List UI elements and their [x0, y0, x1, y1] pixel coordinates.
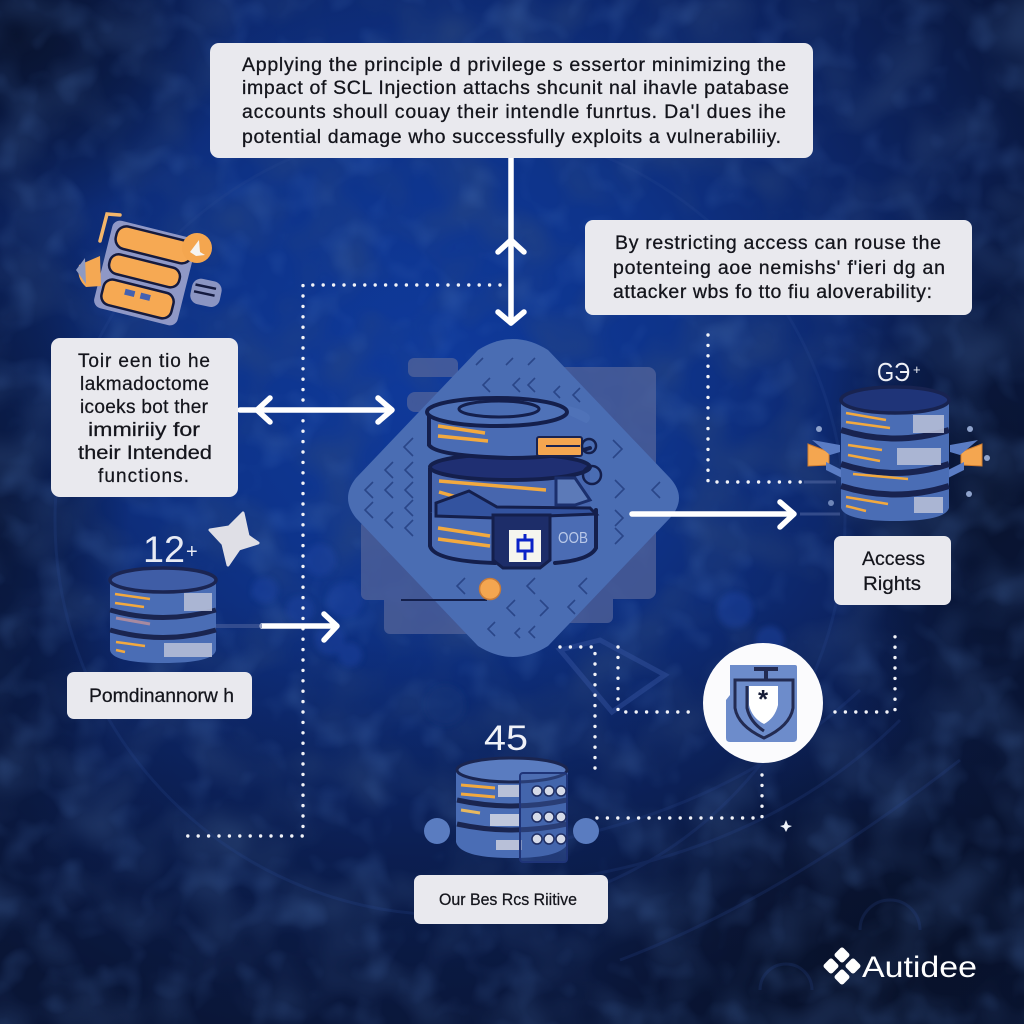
callout: left text: immiriiy for [88, 420, 201, 441]
arrows [240, 158, 794, 640]
callout: top text: impact of SCL Injection attachs shcunit nal ihavle patabase [242, 77, 789, 99]
database: right stack [800, 387, 990, 521]
backing panels [361, 358, 656, 634]
orange stripes [438, 426, 546, 546]
label: left stack [67, 672, 252, 719]
label: Access Rights: Rights [863, 574, 921, 595]
stat: 45: 45 [484, 719, 528, 758]
label: Access Rights [834, 536, 951, 605]
label: bottom stack [414, 875, 608, 924]
label: Access Rights: Access [862, 549, 925, 570]
chevron pattern [365, 358, 660, 638]
roof and lock module [436, 491, 596, 518]
logo: Autidee [862, 951, 977, 984]
callout: left text: icoeks bot ther [80, 397, 209, 418]
callout: right text: attacker wbs fo tto fiu aloverability: [613, 281, 932, 303]
icon: document checklist [76, 214, 223, 327]
label: bottom stack: Our Bes Rcs Riitive [439, 890, 577, 909]
cage [520, 773, 567, 862]
callout: left text: lakmadoctome [80, 374, 209, 395]
stat: 12+: + [186, 541, 198, 563]
icon: star [210, 513, 258, 565]
callout: left text: Toir een tio he [78, 351, 210, 372]
label: left stack: Pomdinannorw h [89, 686, 234, 707]
arrow: left stack to centre [262, 614, 337, 640]
icon: shield badge [703, 643, 823, 763]
callout: right text: potenteing aoe nemishs' f'ieri dg an [613, 257, 945, 279]
stat: G3+: + [913, 362, 921, 377]
stat: 12+: 12 [143, 529, 185, 570]
database: left stack [110, 568, 262, 663]
callout: left text: their Intended [78, 443, 212, 464]
arrow: top box to database [498, 158, 524, 323]
arrow: database to right stack [632, 502, 794, 527]
icon: sparkle [780, 820, 792, 832]
orange node [401, 578, 500, 600]
side connectors [808, 426, 990, 506]
callout: top text [210, 43, 813, 158]
database: bottom stack [424, 758, 599, 862]
stat: G3+: GЭ [877, 357, 910, 387]
bottom tier [430, 510, 596, 563]
icon: shield badge: * [758, 684, 769, 714]
central diamond panel with database [348, 339, 679, 657]
logo [823, 947, 977, 985]
callout: top text: Applying the principle d privilege s essertor minimizing the [242, 54, 786, 76]
callout: left text [51, 338, 238, 497]
dotted connector lines [178, 285, 895, 836]
diamond [348, 339, 679, 657]
middle tier [430, 468, 590, 518]
arrow: left box to database [240, 398, 392, 422]
callout: right text [585, 220, 972, 315]
callout: top text: potential damage who successfully exploits a vulnerabiliiy. [242, 126, 781, 148]
tag label on bottom tier: OOB [558, 530, 588, 547]
callout: top text: accounts shoull couay their intendle funrtus. Da'l dues ihe [242, 101, 786, 123]
callout: right text: By restricting access can rouse the [615, 232, 941, 254]
orange tag [537, 437, 601, 505]
top tier [440, 401, 590, 435]
callout: left text: functions. [98, 466, 189, 487]
